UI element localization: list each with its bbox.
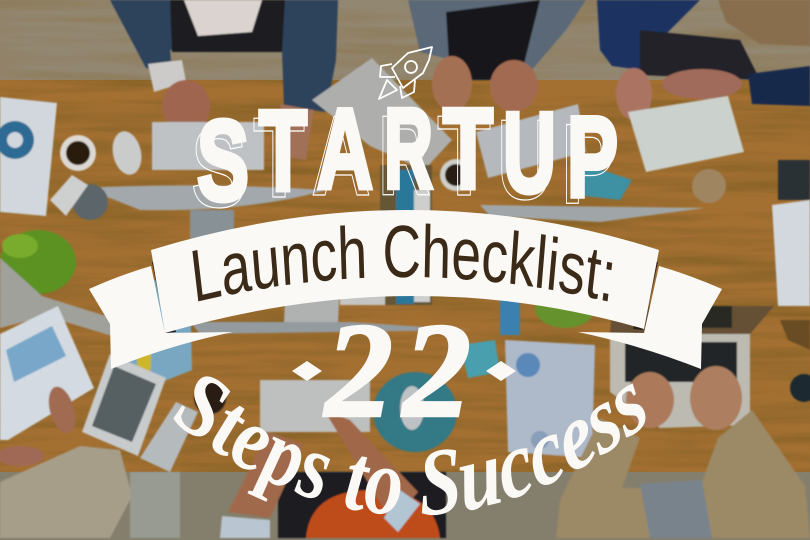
ribbon fold shadows [152,262,658,333]
laptop [610,306,774,428]
ribbon left tail [89,266,233,369]
mug [60,135,96,171]
paper beside tablet [140,402,198,472]
solid layer: S [197,98,249,225]
glass [692,169,726,203]
person bottom right [556,410,810,538]
stapler and cup [72,184,108,220]
solid layer [197,86,618,225]
person top right [597,0,810,120]
monitor base centre [190,322,470,334]
title: STARTUP [191,86,618,232]
diamond right [486,361,516,381]
monitor bar right [480,205,705,222]
keyboard left [152,122,264,170]
hands on laptop [626,372,674,428]
ribbon banner [89,210,722,369]
number: 22: 22 [323,296,481,446]
mug lower [194,382,226,414]
solid layer: R [384,86,433,213]
script heading: Steps to Success: Steps to Success [174,376,646,516]
diamond left [292,361,322,381]
solid layer: A [317,86,373,213]
solid layer: T [443,86,493,213]
person top left [110,0,338,160]
person bottom left [0,384,180,538]
notebook right [628,96,744,172]
plant left [0,230,76,294]
desk paper left [0,97,57,216]
outline layer: S [191,105,247,232]
keyboard bottom [260,380,370,432]
floor top [0,0,810,82]
mouse [109,129,145,177]
plant right [535,288,595,328]
outline layer: R [378,93,431,220]
right edge objects [790,374,810,402]
solid layer: P [567,94,618,221]
document left [0,306,94,440]
calculator [778,160,810,200]
sketch paper [312,58,452,170]
paper right [772,200,810,306]
tablet [82,354,166,456]
outline layer: A [311,93,371,220]
solid layer: U [503,90,556,217]
monitor stand left [85,185,326,210]
ribbon main band [151,210,659,333]
wooden table [0,80,810,472]
person top centre [408,0,586,112]
icon: rocket [379,47,432,99]
solid layer: T [259,88,307,215]
outline layer: U [497,97,554,224]
ribbon right tail [578,266,722,369]
keyboard right [476,104,586,178]
outline layer [191,93,616,232]
folders left [125,280,192,390]
outline layer: P [561,101,616,228]
person bottom centre [220,410,446,538]
gray desk sheet left [0,258,112,336]
heading: Launch Checklist: Launch Checklist: [192,224,612,302]
report paper [505,340,595,458]
outline layer: T [253,95,305,222]
colourful folders [380,165,432,305]
mouse pad [373,372,457,452]
floor bottom [0,468,810,540]
outline layer: T [437,93,491,220]
mug centre [440,159,472,191]
chart circle [0,121,34,159]
supplies centre right [500,285,520,335]
